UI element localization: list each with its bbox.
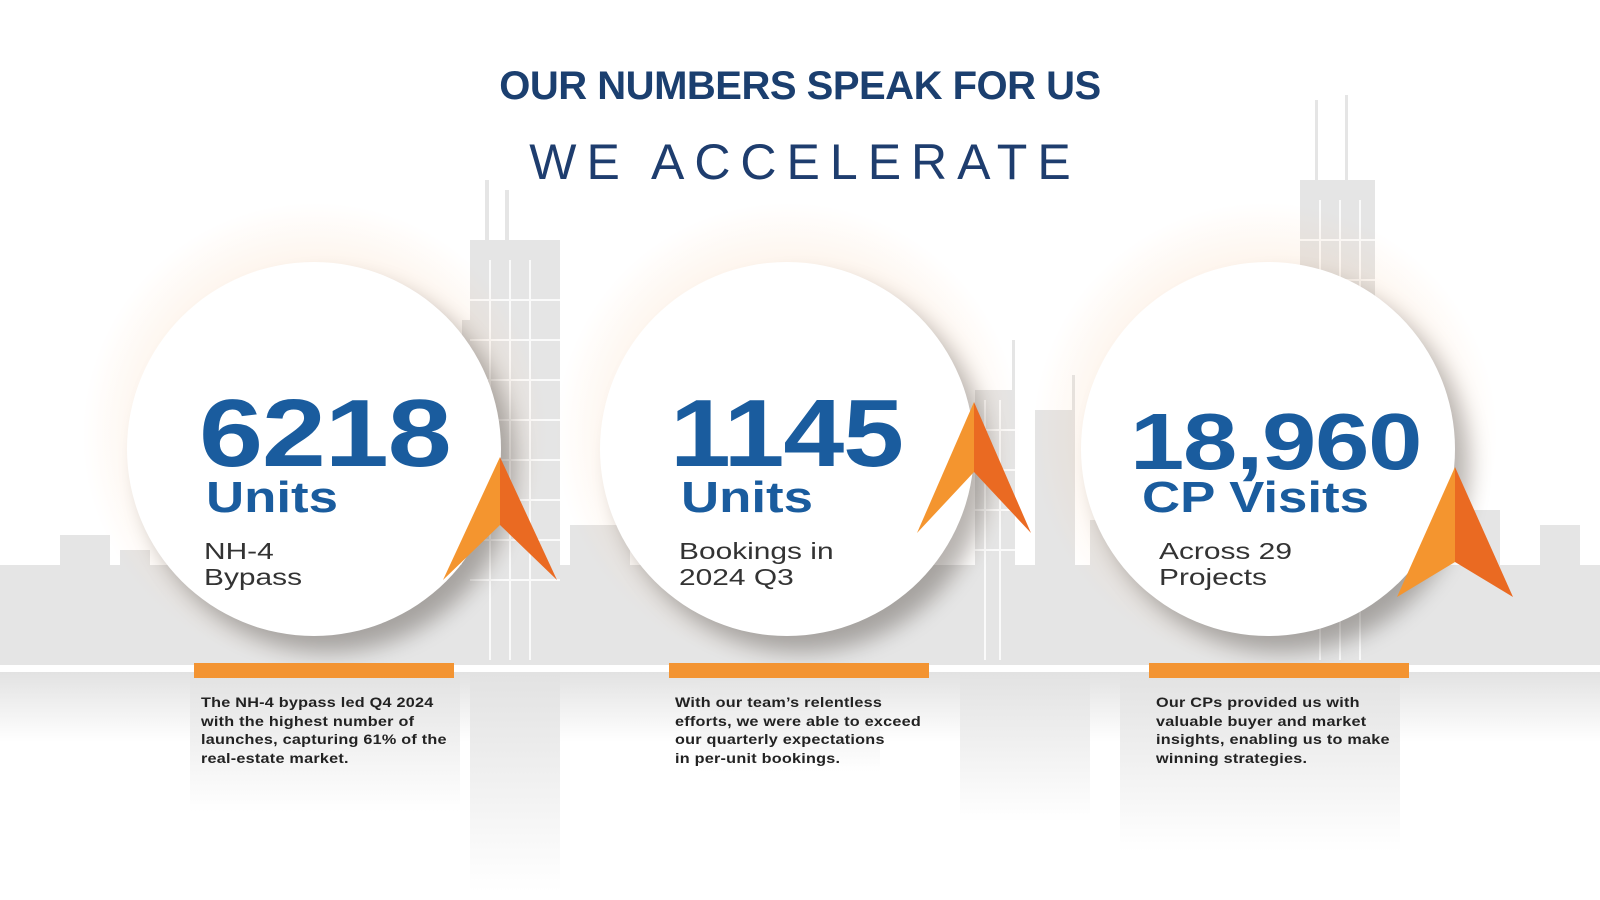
number 2: 1145 [670,380,903,487]
description 1: The NH-4 bypass led Q4 2024 [201,695,433,710]
sub 2: Bookings in [679,538,834,564]
number 1: 6218 [199,380,450,487]
unit 3: CP Visits [1142,473,1369,522]
glows [80,200,550,670]
bar 2 [669,663,929,678]
description 2: With our team’s relentless [675,695,882,710]
sub 3 [1159,538,1292,590]
unit 2: Units [681,473,813,522]
sub 1: NH-4 [204,538,274,564]
description 1: real-estate market. [201,750,349,766]
bar 3 [1149,663,1409,678]
arrow icon 3 [1397,467,1513,597]
description 2: our quarterly expectations [675,732,885,747]
arrow icon 2 [917,402,1031,533]
description 1: launches, capturing 61% of the [201,732,447,747]
description 3: insights, enabling us to make [1156,732,1390,747]
sub 1: Bypass [204,564,302,590]
panel: 1145 units [600,262,1031,663]
description 2: in per-unit bookings. [675,750,840,766]
description 1 [201,695,447,766]
circle 1 [127,262,501,636]
description 3: Our CPs provided us with [1156,695,1360,710]
description 3: valuable buyer and market [1156,714,1366,728]
number 3: 18,960 [1130,397,1421,486]
unit 1: Units [206,473,338,522]
sub 3: Projects [1159,564,1267,590]
sub 2: 2024 Q3 [679,564,794,590]
title: OUR NUMBERS SPEAK FOR US [499,64,1101,108]
sub 2 [679,538,834,590]
arrow icon 1 [443,457,557,580]
circle 2 [600,262,974,636]
description 1: with the highest number of [201,714,414,728]
panel: 6218 units [127,262,557,663]
sub 3: Across 29 [1159,538,1292,564]
description 3 [1156,695,1390,766]
subtitle: WE ACCELERATE [529,134,1081,190]
description 3: winning strategies. [1156,750,1307,766]
description 2: efforts, we were able to exceed [675,714,921,728]
panel: 18,960 CP visits [1081,262,1513,663]
bar 1 [194,663,454,678]
circle 3 [1081,262,1455,636]
description 2 [675,695,921,766]
sub 1 [204,538,302,590]
